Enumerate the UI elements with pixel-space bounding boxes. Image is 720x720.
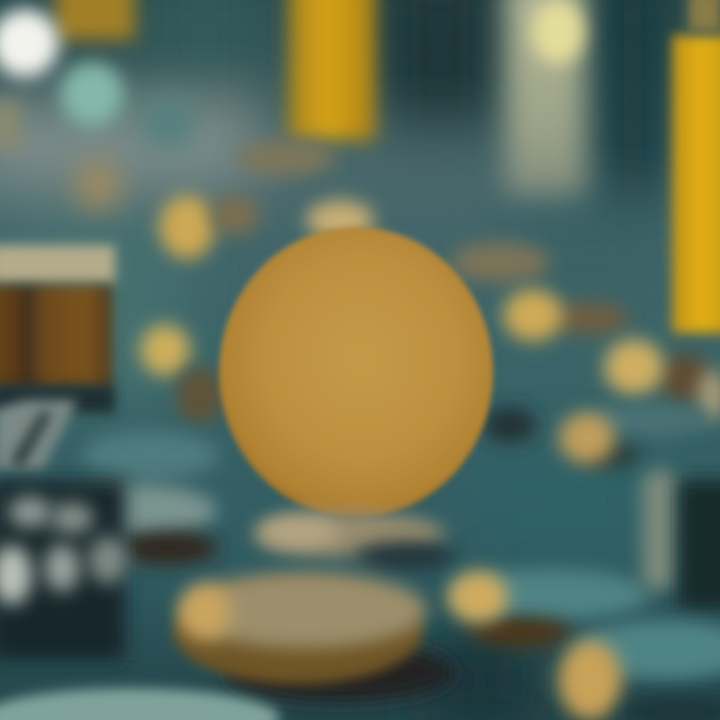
bottom-left pale coin — [0, 688, 280, 720]
central golden sphere — [219, 227, 493, 517]
right coins — [484, 289, 720, 467]
large foreground coin — [174, 572, 455, 702]
left brown block — [0, 245, 224, 423]
sphere pedestal — [255, 512, 455, 570]
golden columns — [55, 0, 720, 333]
pale column — [505, 0, 585, 195]
lower left coins and keys — [0, 400, 218, 660]
blurred small coins upper — [159, 140, 550, 282]
right lower coins — [448, 470, 720, 720]
top-left lights — [0, 9, 196, 210]
